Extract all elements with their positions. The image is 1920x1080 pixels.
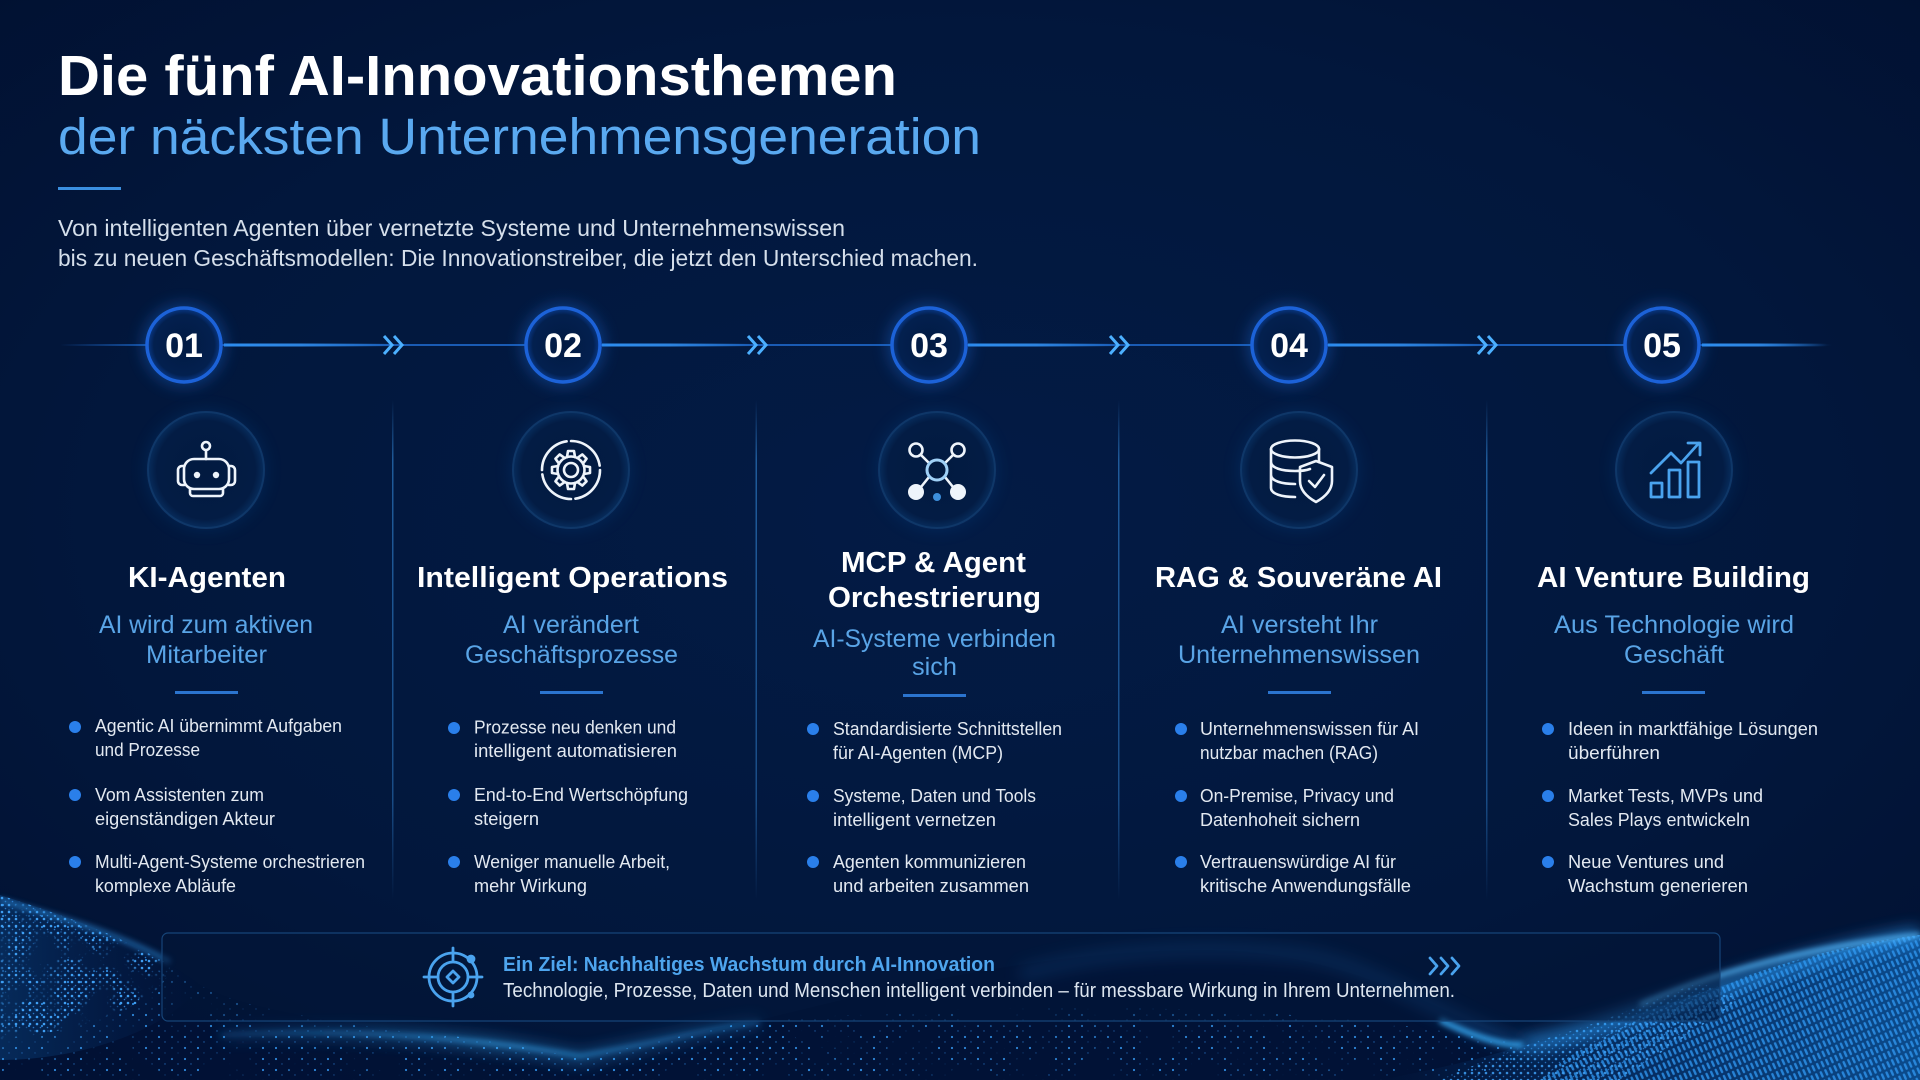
bullet list	[69, 715, 365, 896]
bullet list: Multi-Agent-Systeme orchestrieren	[95, 851, 365, 872]
bullet list	[807, 718, 1062, 896]
panel: AI Venture Building	[1537, 410, 1818, 896]
arrow 4	[1478, 336, 1496, 354]
arrow 1	[384, 336, 402, 354]
icon: robot	[146, 410, 266, 530]
subheading: Geschäft	[1624, 641, 1724, 669]
bullet list: für AI-Agenten (MCP)	[833, 742, 1003, 763]
subheading: Unternehmenswissen	[1178, 641, 1420, 669]
panel: KI-Agenten	[69, 410, 365, 896]
banner text	[503, 954, 1455, 1002]
heading: Intelligent Operations	[417, 562, 728, 594]
background wave of glowing dots	[0, 895, 1920, 1080]
bullet list: Datenhoheit sichern	[1200, 809, 1360, 830]
bullet list: Vom Assistenten zum	[95, 784, 264, 805]
step number 03: 03	[910, 327, 948, 365]
subheading	[813, 625, 1056, 681]
arrow 3	[1110, 336, 1128, 354]
icon: gear with cycle	[511, 410, 631, 530]
subheading: sich	[912, 653, 957, 681]
bullet list: Sales Plays entwickeln	[1568, 809, 1750, 830]
step number 01: 01	[165, 327, 203, 365]
bullet list: Prozesse neu denken und	[474, 716, 676, 738]
timeline line	[60, 344, 1832, 346]
title: Die fünf AI-Innovationsthemen	[58, 44, 897, 108]
bullet list: Agentic AI übernimmt Aufgaben	[95, 715, 342, 736]
icon: triple chevron	[1430, 958, 1459, 974]
heading: KI-Agenten	[128, 562, 286, 594]
step number 02: 02	[544, 327, 582, 365]
title: der näcksten Unternehmensgeneration	[58, 108, 981, 165]
bullet list: Systeme, Daten und Tools	[833, 785, 1036, 806]
bullet list	[1542, 718, 1818, 896]
subheading	[1554, 611, 1794, 669]
icon: target	[424, 948, 482, 1006]
step number 01	[143, 304, 225, 386]
title underline	[58, 187, 121, 190]
banner text: Technologie, Prozesse, Daten und Menschen intelligent verbinden – für messbare Wirkung in Ihrem Unternehmen.	[503, 980, 1455, 1002]
heading	[828, 547, 1041, 614]
step number 02	[522, 304, 604, 386]
panel: Intelligent Operations	[417, 410, 728, 896]
bullet list: intelligent vernetzen	[833, 809, 996, 830]
bullet list: End-to-End Wertschöpfung	[474, 784, 688, 805]
bullet list	[1175, 718, 1419, 896]
panel: MCP & Agent Orchestrierung	[807, 410, 1062, 896]
step number 04	[1248, 304, 1330, 386]
bullet list: steigern	[474, 808, 539, 829]
panel: RAG & Souveräne AI	[1155, 410, 1442, 896]
bullet list: mehr Wirkung	[474, 875, 587, 896]
subheading: AI-Systeme verbinden	[813, 625, 1056, 653]
column dividers	[392, 400, 1488, 900]
bullet list: eigenständigen Akteur	[95, 808, 275, 829]
bullet list: Unternehmenswissen für AI	[1200, 718, 1419, 739]
icon: database with shield	[1239, 410, 1359, 530]
bullet list: komplexe Abläufe	[95, 875, 236, 896]
icon: network	[877, 410, 997, 530]
bullet list: Market Tests, MVPs und	[1568, 785, 1763, 806]
step number 05	[1621, 304, 1703, 386]
bullet list: überführen	[1568, 742, 1660, 763]
bullet list: Wachstum generieren	[1568, 875, 1748, 896]
bullet list: kritische Anwendungsfälle	[1200, 875, 1411, 896]
bullet list: intelligent automatisieren	[474, 740, 677, 761]
subheading	[99, 611, 313, 669]
bullet list: und arbeiten zusammen	[833, 875, 1029, 896]
bullet list: Vertrauenswürdige AI für	[1200, 851, 1396, 872]
subheading: Geschäftsprozesse	[465, 641, 678, 669]
bullet list: Standardisierte Schnittstellen	[833, 718, 1062, 739]
subheading: Aus Technologie wird	[1554, 611, 1794, 639]
subheading	[465, 611, 678, 669]
subheading: Mitarbeiter	[146, 641, 267, 669]
icon: growth chart	[1614, 410, 1734, 530]
subheading: AI versteht Ihr	[1221, 611, 1378, 639]
intro text: bis zu neuen Geschäftsmodellen: Die Innovationstreiber, die jetzt den Unterschied machen.	[58, 245, 978, 271]
step number 04: 04	[1270, 327, 1308, 365]
bullet list: und Prozesse	[95, 739, 200, 760]
banner text: Ein Ziel: Nachhaltiges Wachstum durch AI-Innovation	[503, 954, 995, 976]
heading: MCP & Agent	[841, 547, 1026, 579]
step number 03	[888, 304, 970, 386]
callout: goal banner	[162, 933, 1720, 1021]
bullet list	[448, 716, 688, 896]
subheading: AI wird zum aktiven	[99, 611, 313, 639]
heading: RAG & Souveräne AI	[1155, 562, 1442, 594]
subheading	[1178, 611, 1420, 669]
subheading: AI verändert	[503, 611, 639, 639]
bullet list: Agenten kommunizieren	[833, 851, 1026, 872]
intro text	[58, 215, 978, 271]
intro text: Von intelligenten Agenten über vernetzte Systeme und Unternehmenswissen	[58, 215, 845, 241]
heading: Orchestrierung	[828, 582, 1041, 614]
bullet list: Ideen in marktfähige Lösungen	[1568, 718, 1818, 739]
step number 05: 05	[1643, 327, 1681, 365]
bullet list: Weniger manuelle Arbeit,	[474, 851, 670, 872]
bullet list: Neue Ventures und	[1568, 851, 1724, 872]
bullet list: On-Premise, Privacy und	[1200, 785, 1394, 806]
heading: AI Venture Building	[1537, 562, 1810, 594]
title	[58, 44, 981, 165]
bullet list: nutzbar machen (RAG)	[1200, 742, 1378, 763]
arrow 2	[748, 336, 766, 354]
